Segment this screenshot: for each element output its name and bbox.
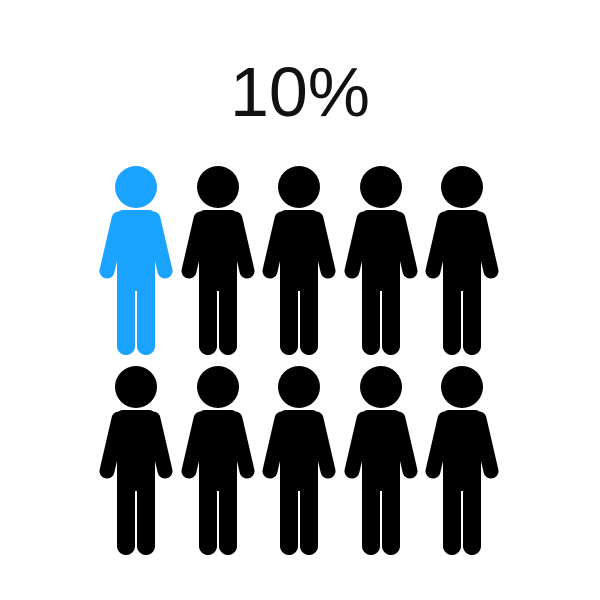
person 4 <box>352 166 410 355</box>
person 10 <box>433 366 491 555</box>
person 6 <box>107 366 165 555</box>
title: 10% <box>230 53 370 131</box>
person 8 <box>270 366 328 555</box>
person 9 <box>352 366 410 555</box>
person 7 <box>189 366 247 555</box>
person 3 <box>270 166 328 355</box>
person 2 <box>189 166 247 355</box>
person 1 (highlighted) <box>107 166 165 355</box>
person 5 <box>433 166 491 355</box>
